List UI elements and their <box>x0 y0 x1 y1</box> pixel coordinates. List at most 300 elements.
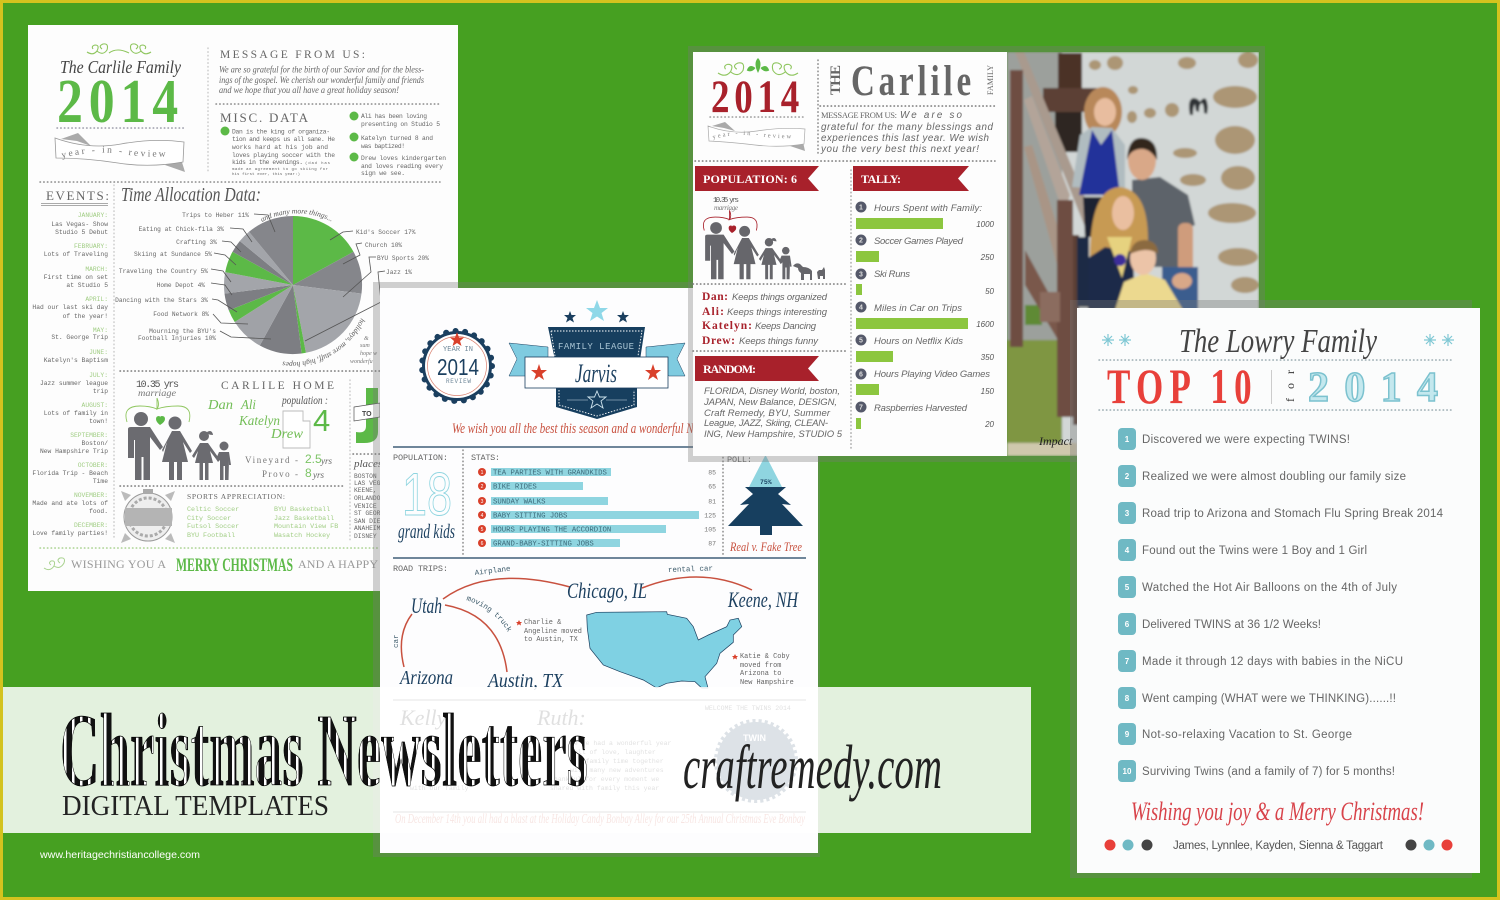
faded lower section: On December 14th you all had a blast at the Holiday Candy Bonbay Alley for our 25th Annual Christmas Eve Bonbay <box>395 812 805 827</box>
text: message from us: We are so <box>900 110 963 121</box>
faded lower section: We've had a wonderful year <box>570 740 672 747</box>
list: misc data: his first ever, this year:) <box>232 172 300 177</box>
labels: transport: car <box>393 634 401 648</box>
labels: cities: Austin, TX <box>486 670 564 692</box>
timeline: events list: Florida Trip - Beach <box>32 470 108 477</box>
list: top ten items: 3 <box>1125 509 1130 518</box>
bar chart: stats: 105 <box>704 526 716 534</box>
heading: time allocation: Time Allocation Data: <box>121 184 261 206</box>
text: random keywords: JAPAN, New Balance, DESIGN, <box>703 397 837 408</box>
ribbon: population 6 <box>695 166 819 191</box>
labels: transport <box>393 565 713 648</box>
heading: top 10: TOP 10 <box>1107 358 1258 414</box>
list: family roles <box>702 291 828 347</box>
faded lower section: with our family <box>410 785 469 792</box>
text: years of marriage <box>136 380 179 398</box>
timeline: events list: NOVEMBER: <box>74 492 108 499</box>
text: family names: Dan <box>207 398 233 413</box>
bar chart: stats: 65 <box>708 484 716 490</box>
faded lower section: WELCOME THE TWINS 2014 <box>705 705 791 712</box>
footer: merry christmas greeting: MERRY CHRISTMAS <box>176 555 293 576</box>
panel: Carlile family red newsletter with photo <box>692 52 1259 456</box>
ornament: green swirl <box>87 44 151 54</box>
list: misc data: and loves reading every <box>361 163 443 170</box>
bar chart: stats: SUNDAY WALKS <box>493 498 546 506</box>
year 2014 teal: 2014 <box>1308 365 1438 411</box>
list: places <box>353 458 388 540</box>
faded lower section: with many new adventures <box>570 767 664 774</box>
faded lower section: TWIN <box>743 733 766 743</box>
shadow: panel four <box>1070 300 1472 878</box>
note: Katie and Coby: moved from <box>740 662 781 670</box>
bar chart: stats <box>471 453 716 548</box>
text: family names: Ali <box>240 398 256 413</box>
labels: cities <box>398 578 799 692</box>
bar chart: tally: 4 <box>859 304 863 312</box>
ribbon: random: RANDOM: <box>703 362 757 376</box>
text: message from us: MESSAGE FROM US: <box>821 110 897 120</box>
pie labels: Dancing with the Stars 3% <box>115 297 208 304</box>
ribbon: population 6: POPULATION: 6 <box>703 172 797 186</box>
bar chart: tally: 1 <box>859 204 863 212</box>
note: Charlie and Angeline <box>516 619 582 644</box>
list: places: places <box>353 458 382 470</box>
pie labels: BYU Sports 20% <box>377 255 429 262</box>
timeline: events list: Katelyn's Baptism <box>44 357 108 364</box>
timeline: events list: JANUARY: <box>78 212 108 219</box>
year 2014: 2014 <box>57 68 184 136</box>
bar chart: tally: 250 <box>980 253 995 262</box>
list: family roles: Keeps things interesting <box>727 307 828 318</box>
list: misc data: sign we see. <box>361 170 405 177</box>
list: places: BOSTON <box>354 473 377 480</box>
list: top ten items: 6 <box>1125 620 1130 629</box>
timeline: events list: SEPTEMBER: <box>70 432 108 439</box>
pie labels: Crafting 3% <box>176 239 217 246</box>
text: random keywords: ING, New Hampshire, STUDIO 5 <box>704 429 843 440</box>
shadow: panel two <box>373 282 820 857</box>
list: top ten items: Made it through 12 days with babies in the NiCU <box>1142 656 1403 668</box>
list: top ten items: 4 <box>1125 546 1130 555</box>
labels: transport: moving truck <box>466 596 512 632</box>
timeline: events list: Had our last ski day <box>32 304 108 311</box>
list: top ten items: Road trip to Arizona and Stomach Flu Spring Break 2014 <box>1142 508 1444 520</box>
timeline: events list: town! <box>89 418 108 425</box>
list: misc data: Dan is the king of organiza- <box>232 128 330 136</box>
timeline: events list: AUGUST: <box>82 402 108 409</box>
bar chart: tally: Ski Runs <box>874 269 910 280</box>
list: places: ST GEORGE <box>354 510 388 517</box>
ribbon: year in review <box>54 133 185 172</box>
pie labels <box>115 210 429 368</box>
list: misc data: Katelyn turned 8 and <box>361 135 433 142</box>
bar chart: stats: 1 <box>481 470 484 476</box>
pie labels: holidays, more stuff, high hopes <box>282 318 366 368</box>
photo wall <box>1060 52 1259 456</box>
bar chart: stats: BABY SITTING JOBS <box>493 512 568 520</box>
list: misc data: made an agreement to go skiing for <box>232 167 329 172</box>
list: family roles: Keeps Dancing <box>755 321 817 332</box>
timeline: events list: JUNE: <box>89 349 108 356</box>
text: message: and we hope that you all have a great holiday season! <box>219 86 399 96</box>
pie labels: wonderfu <box>350 358 373 365</box>
icon: family figures <box>126 398 231 480</box>
labels: transport: Airplane <box>474 566 511 578</box>
bar chart: stats: 85 <box>708 470 716 476</box>
badge: year in review 2014 <box>422 331 492 401</box>
list: places: ORLANDO <box>354 495 381 502</box>
heading: misc data: MISC. DATA <box>220 110 309 125</box>
bar chart: stats: HOURS PLAYING THE ACCORDION <box>493 526 611 534</box>
list: top ten items: 10 <box>1123 767 1132 776</box>
stat: population 4 <box>281 393 330 438</box>
pie labels: Mourning the BYU's <box>149 328 216 335</box>
poll: real or fake tree: POLL: <box>727 455 752 465</box>
stat: population 4: population : <box>281 393 328 407</box>
text: years of marriage: marriage <box>714 204 738 212</box>
faded lower section: full of love, laughter <box>570 749 656 756</box>
text: random keywords: FLORIDA, Disney World, boston, <box>704 386 840 397</box>
badge: year in review 2014: REVIEW <box>446 378 471 385</box>
stat: years lived: yrs <box>320 456 332 466</box>
list: family roles: Drew: <box>702 335 735 347</box>
heading: Carlile home: CARLILE HOME <box>221 380 334 392</box>
stat: years lived: 2.5 <box>305 452 322 466</box>
text: family names <box>207 398 304 442</box>
ribbon: year in review <box>708 122 806 151</box>
list: sports appreciation: Wasatch Hockey <box>274 532 330 540</box>
text: message: ings of the gospel. We cherish our wonderful family and friends <box>219 75 424 86</box>
text: message from us: you the very best this next year! <box>820 144 979 155</box>
bar chart: stats: BIKE RIDES <box>493 484 537 492</box>
pie labels: hope w <box>360 351 377 357</box>
text: message: We are so grateful for the birth of our Savior and for the bless- <box>219 64 424 76</box>
title: the Carlile family: THE <box>828 65 844 95</box>
pie labels: Football Injuries 10% <box>138 335 216 342</box>
timeline: events list: New Hampshire Trip <box>40 448 108 455</box>
note: Katie and Coby: Arizona to <box>740 670 781 678</box>
pie labels: and many more things... <box>261 210 332 222</box>
pie labels: Skiing at Sundance 5% <box>134 251 212 258</box>
note: Katie and Coby <box>732 653 794 687</box>
timeline: events list: MARCH: <box>85 266 108 273</box>
timeline: events list: Lots of Traveling <box>44 251 108 258</box>
timeline: events list: trip <box>93 388 108 395</box>
list: top ten items: Watched the Hot Air Balloons on the 4th of July <box>1142 582 1397 594</box>
bar chart: stats: 87 <box>708 540 716 548</box>
footer: merry christmas greeting: WISHING YOU A <box>71 557 166 571</box>
ribbon: tally <box>853 166 969 191</box>
photo girl <box>1084 87 1122 137</box>
stat: population 4: 4 <box>313 403 330 438</box>
badge: year in review 2014: YEAR IN <box>443 346 473 354</box>
bar chart: stats: TEA PARTIES WITH GRANDKIDS <box>493 470 607 478</box>
list: places: VENICE <box>354 503 377 510</box>
list: sports appreciation: SPORTS APPRECIATION: <box>187 492 285 501</box>
list: sports appreciation: BYU Basketball <box>274 506 330 514</box>
timeline: events list: Boston/ <box>82 440 108 447</box>
bar chart: stats: 125 <box>704 512 716 520</box>
text: random keywords <box>703 386 843 440</box>
ribbon: year in review: year - in - review <box>712 130 792 140</box>
timeline: events list: Studio 5 Debut <box>55 229 108 236</box>
panel: Carlile family green newsletter <box>28 25 458 591</box>
pie labels: Home Depot 4% <box>157 282 205 289</box>
list: misc data: works hard at his job and <box>232 144 328 151</box>
list: top ten items: 9 <box>1125 730 1130 739</box>
list: misc data: (dad has <box>305 161 331 166</box>
list: top ten items: 2 <box>1125 472 1130 481</box>
faded lower section: Ruth: <box>536 705 586 730</box>
bar chart: stats: 81 <box>708 498 716 506</box>
stat: years lived: Vineyard - <box>245 455 298 465</box>
timeline: events list: food. <box>89 508 108 515</box>
timeline: events list: DECEMBER: <box>74 522 108 529</box>
icon: joy letter J <box>354 388 380 443</box>
title: the Carlile family: Carlile <box>851 58 975 105</box>
list: misc data: Ali has been loving <box>361 113 427 120</box>
pie labels: Eating at Chick-fila 3% <box>139 226 224 233</box>
list: top ten items: Discovered we were expecting TWINS! <box>1142 434 1350 446</box>
list: family roles: Katelyn: <box>702 320 752 332</box>
stat: years lived: 8 <box>305 466 312 480</box>
text: random keywords: Craft Remedy, BYU, Summer <box>704 408 831 419</box>
list: top ten items: Surviving Twins (and a family of 7) for 5 months! <box>1142 766 1395 778</box>
stars above shield <box>564 300 629 322</box>
photo boy <box>1115 273 1183 310</box>
bar chart: tally: Miles in Car on Trips <box>874 303 962 314</box>
list: family roles: Ali: <box>702 306 724 318</box>
timeline: events list: Made and ate lots of <box>32 500 108 507</box>
bar chart: tally: 7 <box>859 404 863 412</box>
text: message from us: grateful for the many blessings and <box>821 122 994 133</box>
text: message from us: experiences this last year. We wish <box>821 133 989 144</box>
signature: family names <box>1104 840 1452 852</box>
pie labels: Jazz 1% <box>386 269 412 276</box>
bar chart: tally: 2 <box>859 238 863 244</box>
pie labels: sum <box>360 343 370 349</box>
list: sports appreciation: Mountain View FB <box>274 523 338 531</box>
labels: transport: rental car <box>668 565 713 575</box>
note: Katie and Coby: Katie & Coby <box>740 653 790 661</box>
title: the Carlile family: FAMILY <box>986 65 995 95</box>
badge: year in review 2014: 2014 <box>437 354 479 380</box>
photographer signature: Impact <box>1038 434 1073 448</box>
bar chart: stats: 2 <box>481 484 484 490</box>
list: places: KEENE, NH <box>354 487 388 494</box>
subheading: digital templates: DIGITAL TEMPLATES <box>62 790 329 822</box>
family name: The Carlile Family <box>60 57 181 77</box>
pie labels: Food Network 8% <box>153 311 209 318</box>
timeline: events list: Lots of family in <box>44 410 108 417</box>
pie labels: Trips to Heber 11% <box>182 212 249 219</box>
timeline: events list: at Studio 5 <box>66 282 108 289</box>
timeline: events list: St. George Trip <box>51 334 108 341</box>
pie leader lines <box>211 214 385 341</box>
faded lower section: shared with family this year <box>550 785 659 792</box>
list: top ten items: Went camping (WHAT were we THINKING)......!! <box>1142 693 1396 705</box>
stat: years lived: Provo - <box>262 469 298 479</box>
signature: family names: James, Lynnlee, Kayden, Sienna & Taggart <box>1173 840 1384 852</box>
timeline: events list: Las Vegas- Show <box>51 221 108 228</box>
routes: road trip arcs <box>401 577 752 672</box>
pie labels: & <box>364 336 369 342</box>
bar chart: tally: 20 <box>984 420 995 429</box>
timeline: events list: Love family parties! <box>32 530 108 537</box>
poll: real or fake tree <box>727 455 803 554</box>
list: misc data <box>220 112 446 177</box>
heading: road trips: ROAD TRIPS: <box>393 564 448 574</box>
title: the Lowry family: The Lowry Family <box>1179 323 1378 360</box>
labels: cities: Utah <box>411 593 442 618</box>
faded lower section: and family time together <box>570 758 664 765</box>
ornament: green fleur swirl <box>718 58 798 75</box>
faded lower section: Kelly <box>399 705 447 730</box>
stat: years lived: yrs <box>312 470 324 480</box>
heading: message from us: MESSAGE FROM US: <box>220 49 365 61</box>
pie labels: Kid's Soccer 17% <box>356 229 416 236</box>
icons: snowflakes <box>1102 334 1454 346</box>
icon: family figures with dogs <box>703 210 825 280</box>
stat: population 18: grand kids <box>398 521 455 543</box>
photo stairs <box>1058 53 1082 88</box>
stat: population 18: POPULATION: <box>393 453 448 463</box>
timeline: events list: First time on set <box>44 274 108 281</box>
bar chart: tally: 350 <box>981 353 995 362</box>
bar chart: tally: Soccer Games Played <box>874 236 964 247</box>
bar chart: stats: GRAND-BABY-SITTING JOBS <box>493 540 594 548</box>
list: sports appreciation: City Soccer <box>187 515 231 523</box>
pie labels: Church 10% <box>365 242 402 249</box>
stat: population 18 <box>393 453 455 543</box>
bar chart: stats: STATS: <box>471 453 500 463</box>
text: craftremedy.com: craftremedy.com <box>683 734 942 802</box>
poll: real or fake tree: 75% <box>760 479 772 486</box>
icon: joy letter J: TO <box>362 411 372 418</box>
text: years of marriage: 10.35 yrs <box>713 197 739 205</box>
text: season wishes: We wish you all the best this season and a wonderful New Year! <box>452 421 732 437</box>
text: years of marriage <box>713 197 739 212</box>
footer: merry christmas greeting <box>44 555 378 576</box>
faded lower section: thankful for every moment we <box>550 776 659 783</box>
bar chart: tally: 150 <box>981 387 995 396</box>
bar chart: tally: 3 <box>859 272 863 278</box>
panel: Jarvis family league newsletter <box>380 288 818 853</box>
list: top ten items: Found out the Twins were 1 Boy and 1 Girl <box>1142 545 1367 557</box>
labels: cities: Chicago, IL <box>567 578 647 603</box>
timeline: events list: FEBRUARY: <box>74 243 108 250</box>
timeline: events list: APRIL: <box>85 296 108 303</box>
bar chart: tally: 5 <box>859 338 863 344</box>
list: top ten items: 1 <box>1125 435 1130 444</box>
list: family roles: Keeps things funny <box>739 336 819 347</box>
ribbon: tally: TALLY: <box>861 172 901 186</box>
list: places: ANAHEIM <box>354 525 381 532</box>
list: top ten items: 8 <box>1125 694 1130 703</box>
shield: family league Jarvis: FAMILY LEAGUE <box>558 342 634 352</box>
text: for: for <box>1283 370 1297 402</box>
timeline: events list: Jazz summer league <box>40 380 108 387</box>
bar chart: stats: 5 <box>481 527 484 533</box>
photo woman <box>1077 237 1089 307</box>
faded lower section <box>393 700 806 827</box>
note: Charlie and Angeline: to Austin, TX <box>524 636 579 644</box>
timeline: events list: MAY: <box>93 327 108 334</box>
note: Katie and Coby: New Hampshire <box>740 679 794 687</box>
list: sports appreciation: BYU Football <box>187 532 235 540</box>
photo man <box>1132 177 1195 267</box>
list: top ten items: Delivered TWINS at 36 1/2 Weeks! <box>1142 619 1321 631</box>
list: sports appreciation: Jazz Basketball <box>274 515 334 523</box>
watermark url: www.heritagechristiancollege.com <box>39 849 200 861</box>
list: sports appreciation: Futsol Soccer <box>187 523 239 531</box>
labels: cities: Arizona <box>398 667 453 689</box>
text: family names: Drew <box>270 427 304 442</box>
bar chart: stats: 6 <box>481 541 484 547</box>
bar chart: tally: Hours Spent with Family: <box>874 203 982 214</box>
list: sports appreciation: Celtic Soccer <box>187 506 239 514</box>
text: family names: Katelyn <box>238 414 280 429</box>
list: places: DISNEY W <box>354 533 384 540</box>
bar chart: tally: 1000 <box>976 220 995 229</box>
list: top ten items: Realized we were almost doubling our family size <box>1142 471 1406 483</box>
list: family roles: Dan: <box>702 291 728 303</box>
timeline: events list <box>32 212 108 537</box>
bar chart: tally: 1600 <box>976 320 995 329</box>
heading: events: EVENTS: <box>46 188 109 203</box>
text: message from us <box>820 110 994 155</box>
list: misc data: tion and keeps us all sane. He <box>232 136 335 143</box>
map: USA <box>587 612 742 688</box>
pie chart: time allocation <box>211 214 385 354</box>
ribbon: random <box>695 356 819 381</box>
bar chart: tally <box>856 202 995 429</box>
text: message <box>219 64 424 96</box>
timeline: events list: OCTOBER: <box>78 462 108 469</box>
ribbon: year in review: year - in - review <box>61 146 166 160</box>
text: random keywords: League, JAZZ, Skiing, CLEAN- <box>704 418 828 429</box>
year 2014: 2014 <box>711 71 804 123</box>
bar chart: stats: 4 <box>481 513 484 519</box>
list: top ten items: 5 <box>1125 583 1130 592</box>
bar chart: tally: Hours Playing Video Games <box>874 369 990 380</box>
list: misc data: Drew loves kindergarten <box>361 155 446 162</box>
stat: population 18: 18 <box>402 461 452 528</box>
map: Utah outline <box>283 411 310 448</box>
footer: merry christmas greeting: AND A HAPPY <box>298 557 378 571</box>
list: places: SAN DIEGO <box>354 518 388 525</box>
photo: family on stone wall steps <box>1007 52 1259 456</box>
timeline: events list: Time <box>93 478 108 485</box>
list: misc data: kids in the evenings. <box>232 159 303 166</box>
timeline: events list: JULY: <box>89 372 108 379</box>
poll: real or fake tree: Real v. Fake Tree <box>729 540 802 554</box>
list: misc data: was baptized! <box>361 143 405 150</box>
list: misc data: presenting on Studio 5 <box>361 121 440 128</box>
list: family roles: Keeps things organized <box>732 292 828 303</box>
list: sports appreciation <box>187 492 338 540</box>
bar chart: tally: Hours on Netflix Kids <box>874 336 963 347</box>
shadow: panel three <box>688 46 1265 462</box>
bar chart: tally: 6 <box>859 372 863 378</box>
text: years of marriage: 10.35 yrs <box>136 380 179 391</box>
labels: cities: Keene, NH <box>727 587 799 612</box>
title band <box>3 687 1031 833</box>
pie labels: Traveling the Country 5% <box>119 268 208 275</box>
bar chart: tally: 50 <box>985 287 995 296</box>
list: top ten items <box>1118 428 1444 782</box>
heading: Christmas Newsletters: Christmas Newsletters <box>60 693 588 808</box>
